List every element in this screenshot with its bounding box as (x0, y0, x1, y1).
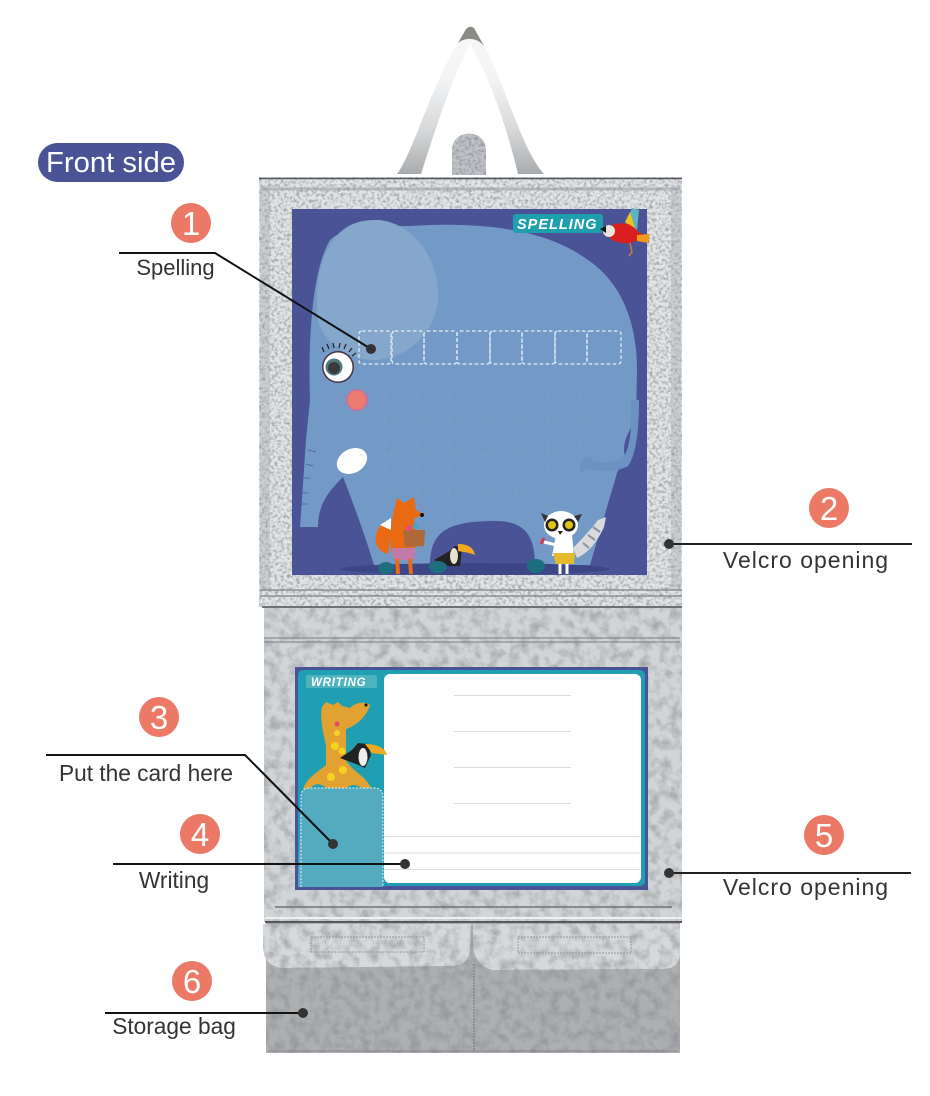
parrot (600, 208, 650, 256)
cheek (347, 390, 367, 410)
callout 6: Storage bag (105, 961, 308, 1039)
callout 4: Writing: 4 (191, 816, 209, 853)
toucan (434, 544, 475, 566)
callout 3: Put the card here: 3 (150, 699, 168, 736)
callout 2: Velcro opening: Velcro opening (723, 547, 889, 573)
spelling letter boxes (359, 331, 621, 364)
fox (375, 497, 425, 574)
tusk (332, 443, 372, 479)
trunk wrinkles (301, 450, 316, 504)
writing guide lines (384, 696, 640, 870)
strap tab (452, 134, 486, 175)
callout 6: Storage bag: Storage bag (112, 1013, 236, 1039)
lemur (541, 511, 606, 574)
callout 2: Velcro opening (664, 488, 912, 573)
ground and arch (430, 521, 535, 565)
callout 5: Velcro opening (664, 815, 911, 900)
callout 1: Spelling: Spelling (136, 255, 215, 280)
elephant body (300, 225, 637, 565)
left pocket flap (263, 924, 471, 968)
giraffe (303, 702, 372, 792)
writing tag: WRITING (311, 677, 366, 689)
callout 4: Writing (113, 814, 410, 893)
callout 3: Put the card here: Put the card here (59, 760, 233, 786)
panel: upper felt sheet (259, 177, 682, 607)
header pill: Front side: Front side (46, 147, 176, 179)
elephant arm (580, 400, 639, 472)
elephant ear (317, 220, 438, 360)
callout 1: Spelling: 1 (182, 205, 200, 242)
faint tracing grid (360, 385, 610, 520)
toucan on giraffe (340, 743, 387, 768)
callout 1: Spelling (119, 203, 376, 354)
callout 6: Storage bag: 6 (183, 963, 201, 1000)
callout 5: Velcro opening: Velcro opening (723, 874, 889, 900)
callout 2: Velcro opening: 2 (820, 490, 838, 527)
panel: lower felt sheet (262, 606, 682, 922)
eye (322, 343, 356, 383)
spelling card (292, 208, 650, 575)
card pocket (298, 788, 383, 887)
writing area (384, 674, 641, 883)
callout 4: Writing: Writing (139, 867, 209, 893)
bushes (378, 559, 545, 574)
spelling tag: SPELLING (517, 217, 598, 233)
callout 5: Velcro opening: 5 (815, 817, 833, 854)
hanging strap (397, 27, 544, 174)
writing card (295, 667, 648, 890)
panel: storage bag (266, 923, 680, 1053)
right pocket flap (473, 924, 680, 970)
writing tag (306, 675, 377, 689)
callout 3: Put the card here (46, 697, 338, 849)
